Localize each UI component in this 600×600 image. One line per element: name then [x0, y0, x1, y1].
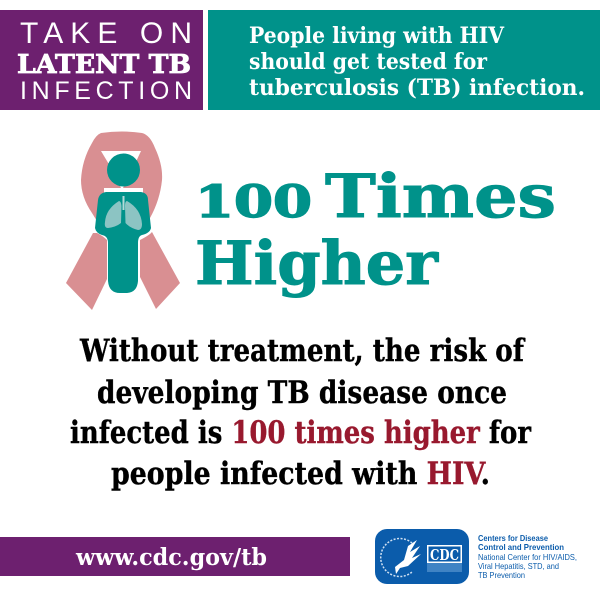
- text block: agency name: Viral Hepatitis, STD, and: [478, 561, 559, 571]
- panel: campaign title: LATENT TB: [17, 50, 191, 80]
- text block: agency name: National Center for HIV/AIDS,: [478, 552, 577, 562]
- panel: header message: People living with HIV: [249, 23, 505, 49]
- text block: agency name: Control and Prevention: [478, 542, 564, 552]
- panel: campaign title: [0, 10, 203, 110]
- heading: 100 Times Higher: 100: [195, 177, 312, 228]
- text block: agency name: Centers for Disease: [478, 533, 548, 543]
- heading: 100 Times Higher: Times: [325, 162, 556, 232]
- icon: ribbon with person and lungs: [66, 132, 180, 310]
- heading: 100 Times Higher: Higher: [195, 229, 439, 299]
- text block: risk statement: infected is 100 times higher for: [70, 415, 532, 451]
- logo: CDC: [375, 529, 469, 584]
- panel: header message: tuberculosis (TB) infection.: [249, 75, 585, 101]
- panel: header message: should get tested for: [249, 49, 487, 75]
- text block: risk statement: [70, 333, 532, 492]
- text block: risk statement: Without treatment, the risk of: [79, 333, 525, 369]
- text block: risk statement: people infected with HIV.: [111, 456, 490, 492]
- panel: campaign title: INFECTION: [20, 77, 192, 105]
- logo: CDC: CDC: [430, 546, 459, 564]
- panel: website bar: [0, 537, 350, 576]
- text block: risk statement: developing TB disease once: [97, 375, 507, 411]
- panel: website bar: www.cdc.gov/tb: [75, 544, 267, 571]
- panel: header message: [208, 10, 600, 110]
- text block: agency name: TB Prevention: [478, 570, 525, 580]
- heading: 100 Times Higher: [195, 162, 556, 299]
- text block: agency name: [478, 533, 577, 580]
- panel: campaign title: TAKE ON: [20, 17, 192, 50]
